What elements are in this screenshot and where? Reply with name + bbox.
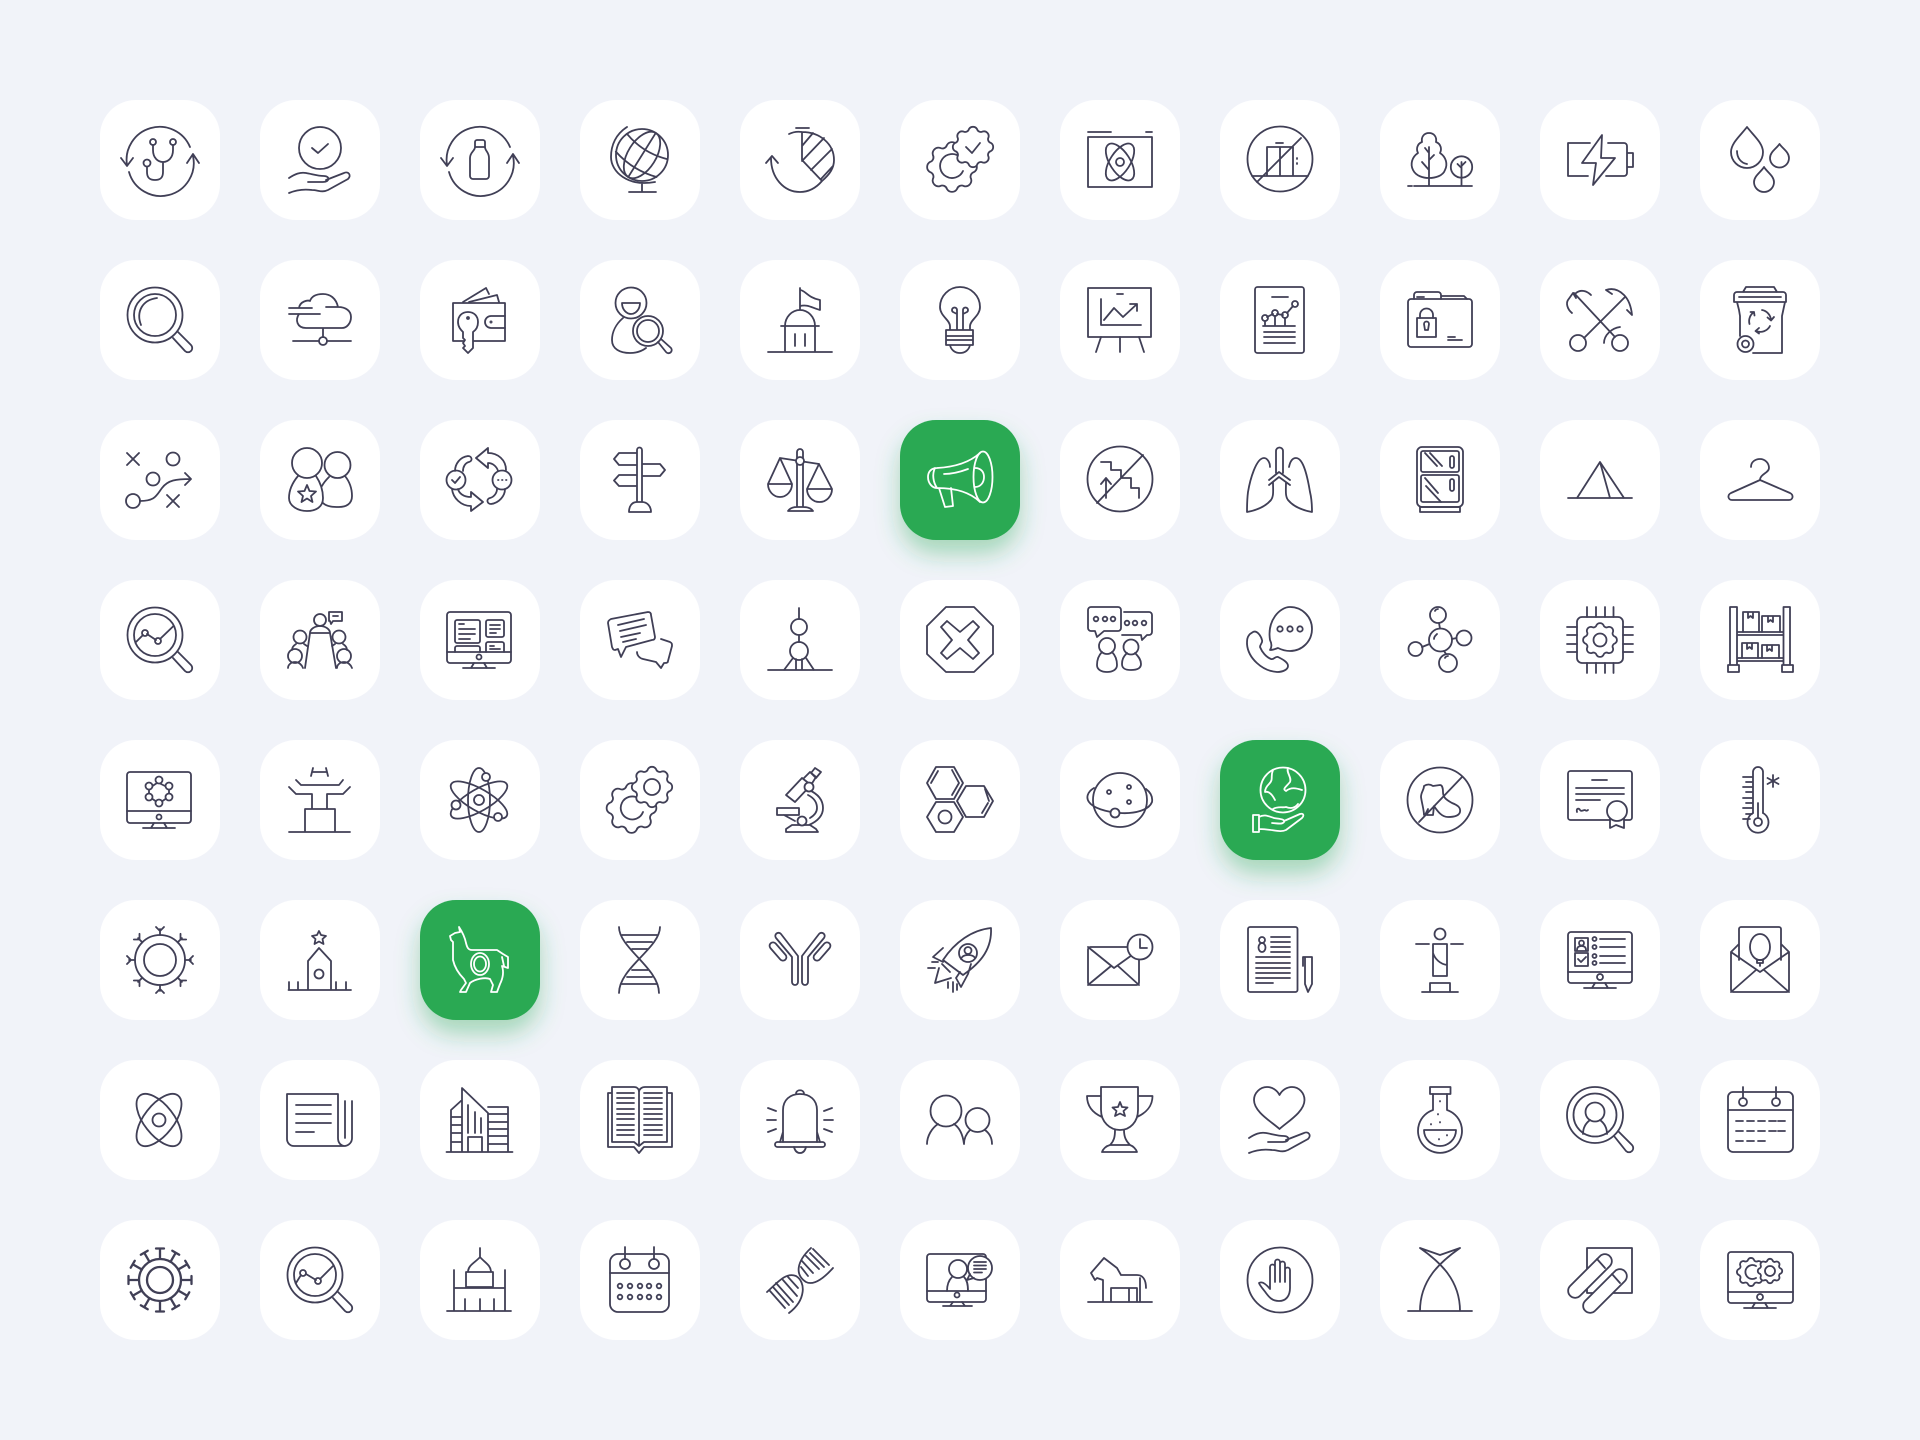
icon: desk globe — [608, 120, 676, 192]
icon: recycling bin — [1734, 287, 1786, 353]
tile: mail with clock — [1060, 900, 1180, 1020]
tile: office building — [420, 1060, 540, 1180]
icon: rocket — [928, 928, 991, 992]
icon: envelope with balloon — [1731, 927, 1789, 992]
tile: battery bolt — [1540, 100, 1660, 220]
icon: cycle check and dots — [446, 448, 512, 511]
icon: no boot — [1408, 768, 1472, 832]
icon: flask — [1418, 1087, 1462, 1153]
tile: chat people — [1060, 580, 1180, 700]
tile: glass cabinet — [1380, 420, 1500, 540]
tile: newspaper — [260, 1060, 380, 1180]
icon: diagonal dna — [767, 1248, 833, 1313]
icon: virus ring — [127, 927, 193, 993]
icon: bottle cycle — [441, 127, 519, 196]
tile: tent — [1540, 420, 1660, 540]
tile: stethoscope cycle — [100, 100, 220, 220]
icon: wallet with key — [453, 288, 505, 353]
icon: dna helix — [619, 927, 660, 993]
tile: bell — [740, 1060, 860, 1180]
tile: calendar with dots — [580, 1220, 700, 1340]
tile: thermometer — [1700, 740, 1820, 860]
tile: water drops — [1700, 100, 1820, 220]
tile: virus ring — [100, 900, 220, 1020]
icon: simple atom — [128, 1086, 190, 1154]
icon: glass cabinet — [1417, 447, 1463, 512]
icon: gears — [607, 767, 672, 833]
icon: magnifier with line chart — [288, 1248, 352, 1312]
icon: two persons — [927, 1096, 992, 1144]
tile: lungs — [1220, 420, 1340, 540]
icon: certificate — [1568, 771, 1632, 828]
tile: folder lock — [1380, 260, 1500, 380]
icon: thermometer — [1743, 767, 1778, 833]
tile: resume and pen — [1220, 900, 1340, 1020]
icon: stethoscope cycle — [121, 127, 199, 196]
icon: capitol flag — [768, 288, 832, 352]
tile: monitor with hex ring — [100, 740, 220, 860]
tile: magnifier with line chart — [260, 1220, 380, 1340]
icon: phone with bubble — [1247, 607, 1312, 672]
tile: virus — [100, 1220, 220, 1340]
icon: lungs — [1247, 448, 1312, 512]
tile: magnifier with person — [1540, 1060, 1660, 1180]
tile: dna helix — [580, 900, 700, 1020]
icon: no stairs — [1088, 446, 1152, 512]
tile: magnifier with chart — [100, 580, 220, 700]
icon: molecule — [1408, 607, 1472, 672]
icon: folder lock — [1408, 292, 1472, 347]
icon: heart on hand — [1249, 1087, 1310, 1153]
icon: christ statue — [1416, 928, 1463, 992]
icon: clothes hanger — [1728, 459, 1793, 500]
tile: chat bubbles — [580, 580, 700, 700]
tile: stop sign with X — [900, 580, 1020, 700]
icon: battery bolt — [1568, 135, 1633, 185]
icon: virus — [128, 1248, 192, 1312]
tile: microscope — [740, 740, 860, 860]
tile: bottle cycle — [420, 100, 540, 220]
tile: rocket — [900, 900, 1020, 1020]
tile: chip with gear — [1540, 580, 1660, 700]
icon: signpost — [614, 448, 665, 512]
tile: light bulb — [900, 260, 1020, 380]
tile: pie timer — [740, 100, 860, 220]
tile: wooden horse — [1060, 1220, 1180, 1340]
tile: signpost — [580, 420, 700, 540]
tile: calendar with dashes — [1700, 1060, 1820, 1180]
tile: gears — [580, 740, 700, 860]
tile: christ statue — [1380, 900, 1500, 1020]
tile: people with star — [260, 420, 380, 540]
tile: report tablet — [1220, 260, 1340, 380]
tile: no boot — [1380, 740, 1500, 860]
tile: flask — [1380, 1060, 1500, 1180]
tile: globe on hand highlighted — [1220, 740, 1340, 860]
icon: resume and pen — [1248, 927, 1312, 992]
icon: monitor with checklist — [1568, 932, 1632, 988]
icon: stop sign with X — [927, 607, 993, 672]
tile: megaphone highlighted — [900, 420, 1020, 540]
tile: paperclips on note — [1540, 1220, 1660, 1340]
icon: scales of justice — [768, 449, 832, 511]
icon: globe on hand — [1253, 768, 1306, 832]
tile: meeting table — [260, 580, 380, 700]
icon: magnifier with chart — [128, 608, 192, 672]
icon: water drops — [1731, 127, 1789, 192]
tile: stop hand — [1220, 1220, 1340, 1340]
icon: planet — [1087, 773, 1152, 827]
icon: chat bubbles — [608, 612, 672, 668]
tile: envelope with balloon — [1700, 900, 1820, 1020]
icon: monitor with hex ring — [127, 772, 191, 828]
tile: clothes hanger — [1700, 420, 1820, 540]
tile: warehouse racks — [1700, 580, 1820, 700]
icon: bell — [767, 1090, 833, 1153]
icon: newspaper — [287, 1094, 352, 1146]
icon: meeting table — [288, 612, 352, 668]
icon: chat people — [1088, 607, 1152, 672]
tile: presentation chart — [1060, 260, 1180, 380]
tile: atom — [420, 740, 540, 860]
icon: church with star — [288, 931, 351, 990]
tile: phone with bubble — [1220, 580, 1340, 700]
tile: molecule — [1380, 580, 1500, 700]
icon: open book — [608, 1087, 672, 1153]
tile: scales of justice — [740, 420, 860, 540]
tile: hand with check — [260, 100, 380, 220]
tile: monument — [260, 740, 380, 860]
tile: heart on hand — [1220, 1060, 1340, 1180]
tile: monitor with person chat — [900, 1220, 1020, 1340]
tile: tied ribbon tower — [1380, 1220, 1500, 1340]
tile: church with star — [260, 900, 380, 1020]
icon: cloud network — [289, 294, 351, 345]
icon: tv tower — [768, 608, 832, 670]
tile: planet — [1060, 740, 1180, 860]
icon: magnifier with person — [1567, 1087, 1633, 1152]
icon: crossed ice axes — [1567, 289, 1632, 351]
tile: cloud network — [260, 260, 380, 380]
icon: monitor documents — [447, 612, 511, 668]
icon: paperclips on note — [1565, 1248, 1632, 1316]
tile: wallet with key — [420, 260, 540, 380]
tile: browser with atom — [1060, 100, 1180, 220]
tile: monitor with checklist — [1540, 900, 1660, 1020]
tile: desk globe — [580, 100, 700, 220]
tile: llama highlighted — [420, 900, 540, 1020]
tile: trees — [1380, 100, 1500, 220]
icon: pie timer — [766, 128, 834, 192]
icon: monument — [289, 768, 350, 832]
icon: trees — [1408, 133, 1472, 186]
icon: wooden horse — [1088, 1258, 1152, 1302]
tile: no stairs — [1060, 420, 1180, 540]
tile: magnifier — [100, 260, 220, 380]
tile: person search — [580, 260, 700, 380]
icon: hand with check — [289, 127, 350, 193]
icon: browser with atom — [1088, 132, 1152, 187]
icon: monitor with gears — [1728, 1252, 1793, 1308]
icon: trophy — [1087, 1087, 1152, 1152]
icon: tied ribbon tower — [1408, 1248, 1472, 1311]
tile: play strategy — [100, 420, 220, 540]
icon: domed palace — [447, 1248, 511, 1311]
icon: megaphone — [928, 452, 992, 507]
tile: no elevator — [1220, 100, 1340, 220]
tile: tv tower — [740, 580, 860, 700]
icon: mail with clock — [1088, 934, 1152, 985]
tile: crossed ice axes — [1540, 260, 1660, 380]
tile: recycling bin — [1700, 260, 1820, 380]
icon: play strategy — [126, 452, 191, 508]
icon: magnifier — [128, 288, 192, 352]
tile: monitor documents — [420, 580, 540, 700]
icon: office building — [446, 1088, 512, 1152]
icon: report tablet — [1255, 287, 1304, 353]
tile: domed palace — [420, 1220, 540, 1340]
icon: no elevator — [1248, 126, 1312, 192]
tile: two persons — [900, 1060, 1020, 1180]
tile: diagonal dna — [740, 1220, 860, 1340]
tile: simple atom — [100, 1060, 220, 1180]
tile: monitor with gears — [1700, 1220, 1820, 1340]
icon: light bulb — [940, 287, 980, 353]
tile: gears with check — [900, 100, 1020, 220]
icon: people with star — [289, 448, 352, 511]
icon: monitor with person chat — [927, 1254, 992, 1306]
icon: microscope — [777, 768, 823, 832]
tile: capitol flag — [740, 260, 860, 380]
icon: stop hand — [1248, 1248, 1312, 1312]
icon: gears with check — [927, 127, 993, 192]
icon: chip with gear — [1567, 607, 1633, 673]
tile: hexagons — [900, 740, 1020, 860]
icon: atom — [446, 768, 512, 832]
icon: hexagons — [927, 767, 993, 832]
icon: calendar with dots — [610, 1247, 669, 1312]
tile: cycle check and dots — [420, 420, 540, 540]
icon: warehouse racks — [1728, 607, 1793, 672]
icon: tent — [1568, 462, 1632, 498]
icon: calendar with dashes — [1728, 1087, 1793, 1152]
icon: person search — [612, 288, 672, 353]
icon: antibody — [768, 933, 832, 985]
tile: open book — [580, 1060, 700, 1180]
tile: trophy — [1060, 1060, 1180, 1180]
tile: antibody — [740, 900, 860, 1020]
icon: presentation chart — [1088, 288, 1151, 352]
icon: llama — [450, 927, 508, 992]
tile: certificate — [1540, 740, 1660, 860]
